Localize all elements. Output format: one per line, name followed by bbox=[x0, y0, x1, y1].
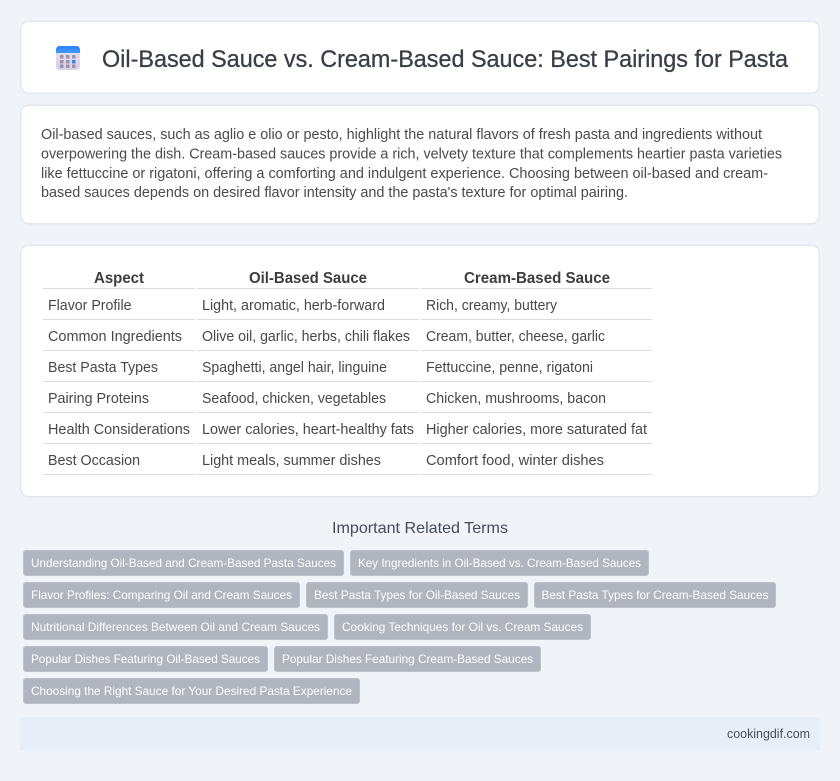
panel: introduction bbox=[21, 105, 819, 224]
tag bbox=[274, 646, 540, 672]
row: best pasta types: Best Pasta Types bbox=[48, 360, 158, 376]
tag: Understanding Oil-Based and Cream-Based Pasta Sauces bbox=[31, 556, 336, 570]
row: flavor profile bbox=[48, 298, 558, 314]
row: flavor profile: Flavor Profile bbox=[48, 298, 132, 314]
tag bbox=[306, 582, 528, 608]
row: common ingredients: Olive oil, garlic, herbs, chili flakes bbox=[202, 329, 410, 345]
footer bbox=[20, 717, 820, 751]
tag bbox=[24, 550, 344, 576]
tag bbox=[24, 678, 360, 704]
row: best pasta types: Fettuccine, penne, rigatoni bbox=[426, 360, 593, 376]
panel: header bbox=[21, 21, 819, 93]
related term tags bbox=[24, 550, 776, 704]
row: pairing proteins bbox=[48, 391, 606, 407]
row: pairing proteins: Seafood, chicken, vegetables bbox=[202, 391, 386, 407]
tag bbox=[24, 582, 300, 608]
row: best pasta types: Spaghetti, angel hair, linguine bbox=[202, 360, 387, 376]
intro text: based sauces depends on desired flavor intensity and the pasta's texture for optimal pairing. bbox=[41, 185, 628, 201]
tag: Cooking Techniques for Oil vs. Cream Sauces bbox=[342, 620, 583, 634]
row: flavor profile: Rich, creamy, buttery bbox=[426, 298, 558, 314]
title: Oil-Based Sauce vs. Cream-Based Sauce: Best Pairings for Pasta bbox=[102, 46, 789, 73]
intro text: Oil-based sauces, such as aglio e olio or pesto, highlight the natural flavors of fresh pasta and ingredients without bbox=[41, 127, 762, 143]
row: common ingredients bbox=[48, 329, 605, 345]
tag: Flavor Profiles: Comparing Oil and Cream Sauces bbox=[31, 588, 292, 602]
tag: Choosing the Right Sauce for Your Desired Pasta Experience bbox=[31, 684, 352, 698]
row: common ingredients: Common Ingredients bbox=[48, 329, 182, 345]
tag: Nutritional Differences Between Oil and Cream Sauces bbox=[31, 620, 320, 634]
table header: Aspect bbox=[94, 270, 145, 287]
tag: Key Ingredients in Oil-Based vs. Cream-Based Sauces bbox=[358, 556, 641, 570]
tag bbox=[534, 582, 776, 608]
row: health considerations: Higher calories, more saturated fat bbox=[426, 422, 647, 438]
tag bbox=[334, 614, 590, 640]
source credit: cookingdif.com bbox=[727, 727, 810, 741]
intro text: like fettuccine or rigatoni, offering a comforting and indulgent experience. Choosing between oil-based and cream- bbox=[41, 166, 768, 182]
row: flavor profile: Light, aromatic, herb-forward bbox=[202, 298, 385, 314]
tag: Popular Dishes Featuring Oil-Based Sauces bbox=[31, 652, 260, 666]
heading: important related terms: Important Related Terms bbox=[332, 520, 508, 537]
intro text: overpowering the dish. Cream-based sauces provide a rich, velvety texture that complements heartier pasta varieties bbox=[41, 146, 782, 162]
tag bbox=[24, 614, 328, 640]
row: health considerations: Health Considerations bbox=[48, 422, 190, 438]
row: best pasta types bbox=[48, 360, 593, 376]
tag bbox=[24, 646, 268, 672]
panel: comparison table bbox=[21, 245, 819, 497]
table header bbox=[94, 270, 610, 287]
row: best occasion: Best Occasion bbox=[48, 453, 140, 469]
row: health considerations: Lower calories, heart-healthy fats bbox=[202, 422, 414, 438]
tag: Best Pasta Types for Cream-Based Sauces bbox=[542, 588, 768, 602]
tag: Best Pasta Types for Oil-Based Sauces bbox=[314, 588, 520, 602]
row: pairing proteins: Chicken, mushrooms, bacon bbox=[426, 391, 606, 407]
tag: Popular Dishes Featuring Cream-Based Sauces bbox=[282, 652, 533, 666]
table header: Cream-Based Sauce bbox=[464, 270, 610, 287]
row: best occasion bbox=[48, 453, 604, 469]
row: best occasion: Light meals, summer dishes bbox=[202, 453, 381, 469]
icon: calendar bbox=[56, 46, 80, 70]
table header: Oil-Based Sauce bbox=[249, 270, 367, 287]
row: best occasion: Comfort food, winter dishes bbox=[426, 453, 604, 469]
tag bbox=[350, 550, 648, 576]
row: common ingredients: Cream, butter, cheese, garlic bbox=[426, 329, 605, 345]
row: health considerations bbox=[48, 422, 647, 438]
row: pairing proteins: Pairing Proteins bbox=[48, 391, 149, 407]
intro text bbox=[41, 127, 782, 201]
